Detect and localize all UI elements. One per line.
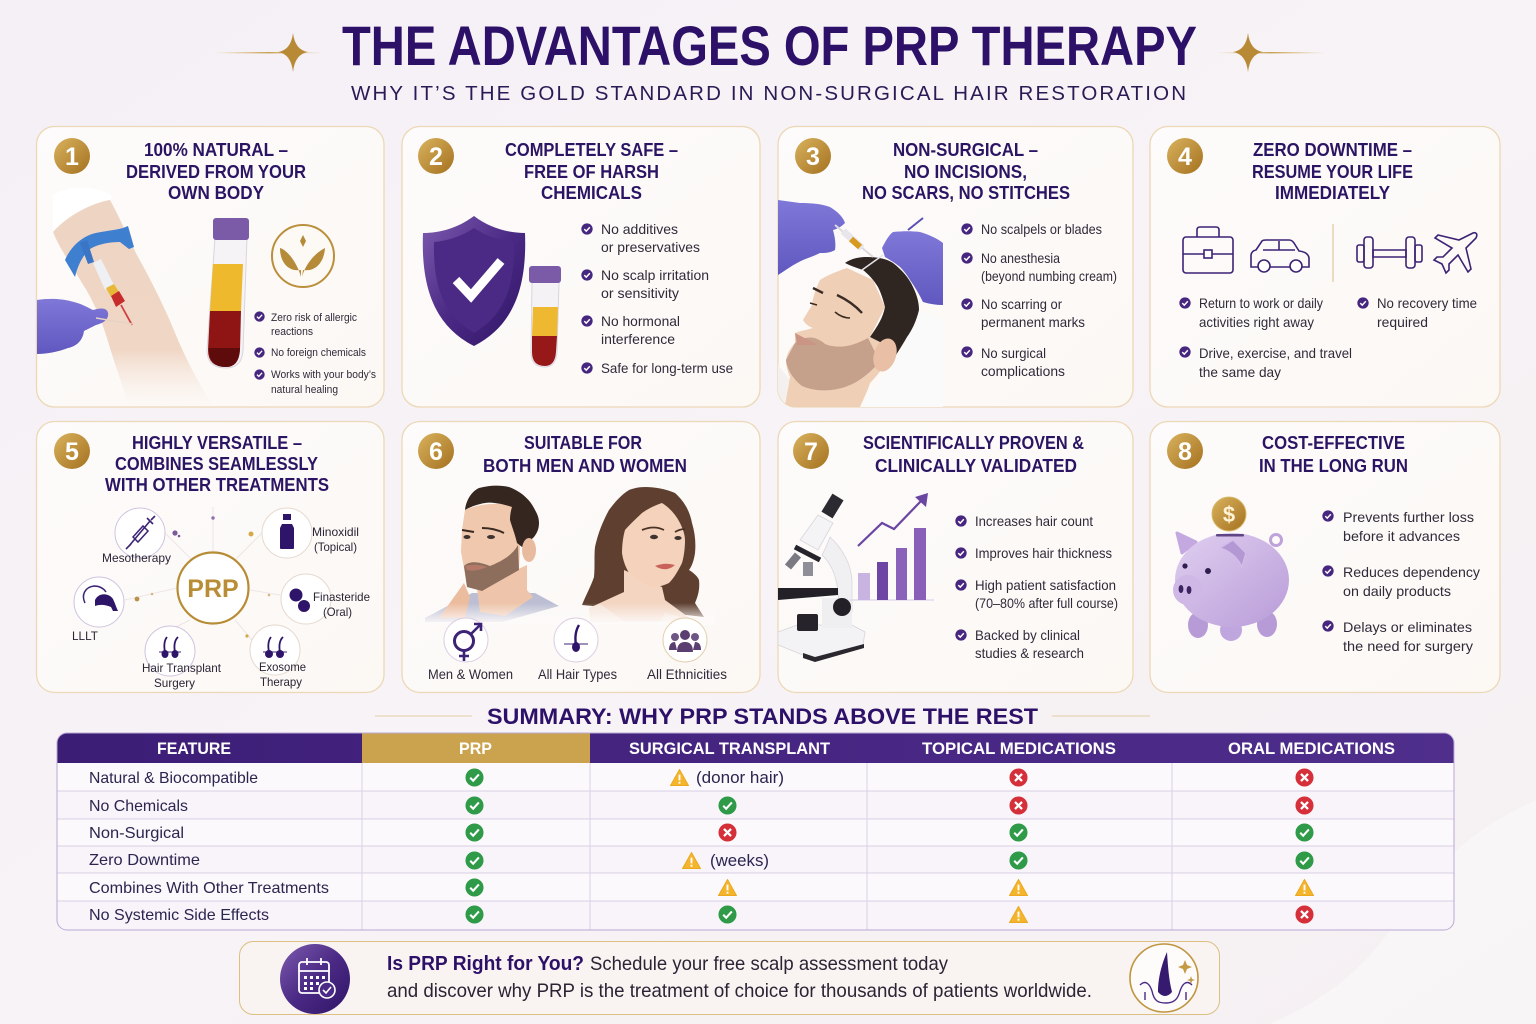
- fade under portraits: [420, 603, 715, 625]
- icon: right gold sparkle: [1217, 33, 1325, 72]
- node: exosome: Therapy: [260, 675, 302, 689]
- heading 1: OWN BODY: [168, 183, 264, 203]
- panel: 6 men and women: [402, 422, 760, 692]
- bullets 7: Improves hair thickness: [975, 545, 1112, 561]
- bullets 4: Drive, exercise, and travel: [1199, 345, 1352, 361]
- row: zero downtime: [89, 851, 1314, 870]
- heading 5: HIGHLY VERSATILE –: [132, 433, 302, 453]
- heading 2: [505, 140, 678, 203]
- node: mesotherapy: Mesotherapy: [102, 551, 171, 565]
- bullets 2: No additives: [601, 221, 678, 237]
- bullets 1: No foreign chemicals: [271, 347, 366, 359]
- number badge 7: [793, 433, 829, 469]
- bullets 4: Return to work or daily: [1199, 295, 1323, 311]
- node: hair transplant: Hair Transplant: [142, 661, 222, 675]
- call to action text: Is PRP Right for You?: [387, 952, 584, 975]
- heading 8: [1259, 433, 1408, 476]
- number badge 2: 2: [429, 143, 443, 171]
- bullets 1: Zero risk of allergic: [271, 312, 357, 324]
- PRP center circle: [178, 552, 248, 624]
- heading 1: 100% NATURAL –: [144, 140, 288, 160]
- row: non-surgical: Non-Surgical: [89, 825, 184, 842]
- chart: rising bars: [850, 493, 934, 600]
- heading 4: RESUME YOUR LIFE: [1252, 162, 1413, 182]
- call to action banner: [240, 942, 1220, 1014]
- heading 4: [1252, 140, 1413, 203]
- illustration: woman portrait: [582, 487, 704, 622]
- subtitle: WHY IT’S THE GOLD STANDARD IN NON-SURGICAL HAIR RESTORATION: [351, 82, 1186, 105]
- icon: shield with check: [423, 216, 525, 346]
- bullets 7: studies & research: [975, 645, 1084, 661]
- row: combines with other treatments: [89, 878, 1314, 897]
- node: minoxidil: (Topical): [314, 540, 357, 554]
- heading 4: IMMEDIATELY: [1275, 183, 1390, 203]
- panel: 4 zero downtime: [1150, 126, 1500, 407]
- heading 2: CHEMICALS: [541, 183, 642, 203]
- heading 2: FREE OF HARSH: [524, 162, 659, 182]
- icon: gold leaves: [272, 225, 334, 287]
- row: zero downtime: (weeks): [710, 852, 769, 870]
- table header: FEATURE: [157, 740, 231, 758]
- heading 1: DERIVED FROM YOUR: [126, 162, 306, 182]
- panel: 2 safe: [402, 126, 760, 407]
- number badge 3: [795, 138, 831, 174]
- node: minoxidil: Minoxidil: [312, 525, 359, 539]
- icon: airplane: [1434, 233, 1477, 273]
- heading 7: [863, 433, 1084, 476]
- bullets 7: (70–80% after full course): [975, 595, 1118, 611]
- call to action text: Schedule your free scalp assessment today: [590, 953, 948, 975]
- panel: 5 versatile: [36, 422, 384, 692]
- heading 5: WITH OTHER TREATMENTS: [105, 475, 329, 495]
- number badge 5: 5: [65, 438, 79, 466]
- bullets 8: Delays or eliminates: [1343, 619, 1472, 635]
- bullets 4: [1179, 295, 1477, 380]
- number badge 1: [54, 138, 90, 174]
- row: non-surgical: [89, 823, 1314, 842]
- icon: all hair types: All Hair Types: [538, 666, 617, 682]
- icon: all ethnicities: [647, 618, 727, 682]
- illustration: man portrait: [425, 486, 559, 622]
- bullets 2: Safe for long-term use: [601, 360, 733, 376]
- bullets 4: required: [1377, 314, 1428, 330]
- illustration: arm with syringe: [37, 200, 202, 390]
- row: no systemic side effects: No Systemic Side Effects: [89, 907, 269, 924]
- icon: men and women: Men & Women: [428, 666, 513, 682]
- panel: 8 cost-effective: [1150, 422, 1500, 692]
- node: mesotherapy: [102, 508, 171, 565]
- bullets 2: or sensitivity: [601, 285, 679, 301]
- bullets 7: High patient satisfaction: [975, 577, 1116, 593]
- heading 8: COST-EFFECTIVE: [1262, 433, 1405, 453]
- bullets 4: No recovery time: [1377, 295, 1477, 311]
- bullets 1: Works with your body’s: [271, 369, 376, 381]
- table header: PRP: [459, 740, 492, 758]
- panel: 3 non-surgical: [778, 126, 1133, 407]
- icon: all hair types: [538, 618, 617, 682]
- heading 2: COMPLETELY SAFE –: [505, 140, 678, 160]
- call to action text: and discover why PRP is the treatment of choice for thousands of patients worldwide.: [387, 980, 1092, 1002]
- icon: all ethnicities: All Ethnicities: [647, 666, 727, 682]
- bullets 8: on daily products: [1343, 583, 1451, 599]
- bullets 7: Backed by clinical: [975, 627, 1080, 643]
- bullets 8: Prevents further loss: [1343, 509, 1474, 525]
- table header: [157, 740, 1395, 758]
- bullets 3: No anesthesia: [981, 250, 1060, 266]
- heading 7: CLINICALLY VALIDATED: [875, 456, 1077, 476]
- heading 1: [126, 140, 306, 203]
- number badge 8: 8: [1178, 438, 1192, 466]
- bullets 4: the same day: [1199, 364, 1281, 380]
- bullets 3: No scalpels or blades: [981, 221, 1102, 237]
- number badge 8: [1167, 433, 1203, 469]
- bullets 2: or preservatives: [601, 239, 700, 255]
- bullets 1: natural healing: [271, 384, 338, 396]
- number badge 6: [418, 433, 454, 469]
- bullets 7: Increases hair count: [975, 513, 1093, 529]
- table header: TOPICAL MEDICATIONS: [922, 740, 1116, 758]
- number badge 4: [1167, 138, 1203, 174]
- bullets 1: reactions: [271, 326, 313, 338]
- bullets 2: No scalp irritation: [601, 267, 709, 283]
- heading 3: NO SCARS, NO STITCHES: [862, 183, 1070, 203]
- illustration: patient with injection: [778, 200, 943, 407]
- node: minoxidil: [262, 508, 359, 558]
- heading 6: [483, 433, 687, 476]
- bullets 8: [1322, 509, 1480, 654]
- row: no chemicals: [89, 796, 1314, 815]
- row: no chemicals: No Chemicals: [89, 798, 188, 815]
- connector lines and dots: [125, 507, 280, 640]
- number badge 1: 1: [65, 143, 79, 171]
- panel: 7 proven: [778, 422, 1133, 692]
- bullets 3: No scarring or: [981, 296, 1062, 312]
- node: finasteride: Finasteride: [313, 590, 370, 604]
- heading 5: [105, 433, 329, 495]
- bullets 3: permanent marks: [981, 314, 1085, 330]
- node: hair transplant: [142, 626, 222, 690]
- bullets 8: Reduces dependency: [1343, 564, 1480, 580]
- table header: ORAL MEDICATIONS: [1228, 740, 1395, 758]
- bullets 3: No surgical: [981, 345, 1046, 361]
- node: LLLT: [72, 577, 124, 643]
- illustration: microscope: [778, 497, 865, 662]
- heading 8: IN THE LONG RUN: [1259, 456, 1408, 476]
- icon: calendar: [280, 944, 350, 1014]
- heading 6: BOTH MEN AND WOMEN: [483, 456, 687, 476]
- bullets 2: [581, 221, 733, 376]
- icon: men and women: [428, 618, 513, 682]
- icon: briefcase: [1183, 227, 1233, 273]
- number badge 7: 7: [804, 438, 818, 466]
- bullets 3: [961, 221, 1117, 379]
- node: hair transplant: Surgery: [154, 676, 195, 690]
- bullets 1: [254, 311, 376, 396]
- heading 5: COMBINES SEAMLESSLY: [115, 454, 318, 474]
- heading 7: SCIENTIFICALLY PROVEN &: [863, 433, 1084, 453]
- node: finasteride: (Oral): [323, 605, 352, 619]
- row: no systemic side effects: [89, 905, 1314, 924]
- title: THE ADVANTAGES OF PRP THERAPY: [342, 14, 1197, 77]
- node: finasteride: [281, 574, 370, 624]
- node: exosome: [250, 625, 306, 689]
- bullets 2: interference: [601, 331, 675, 347]
- illustration: small tube: [529, 266, 561, 367]
- row: zero downtime: Zero Downtime: [89, 852, 200, 869]
- comparison table: [57, 733, 1454, 930]
- heading 3: NON-SURGICAL –: [893, 140, 1038, 160]
- summary heading: SUMMARY: WHY PRP STANDS ABOVE THE REST: [487, 704, 1038, 729]
- row: natural and biocompatible: (donor hair): [696, 769, 784, 787]
- icon: piggy bank with coin: [1173, 497, 1289, 641]
- row: natural and biocompatible: [89, 768, 1314, 787]
- heading 3: NO INCISIONS,: [904, 162, 1027, 182]
- number badge 3: 3: [806, 143, 820, 171]
- bullets 8: before it advances: [1343, 528, 1460, 544]
- panel: 1 natural: [36, 126, 384, 407]
- node: exosome: Exosome: [259, 660, 306, 674]
- number badge 5: [54, 433, 90, 469]
- icon: piggy bank with coin: $: [1223, 502, 1235, 527]
- row: combines with other treatments: Combines With Other Treatments: [89, 880, 329, 897]
- number badge 2: [418, 138, 454, 174]
- bullets 4: activities right away: [1199, 314, 1314, 330]
- bullets 7: [955, 513, 1118, 661]
- bullets 3: complications: [981, 363, 1065, 379]
- bullets 8: the need for surgery: [1343, 638, 1473, 654]
- row: natural and biocompatible: Natural & Biocompatible: [89, 770, 258, 787]
- illustration: blood tube: [207, 218, 249, 368]
- icon: car: [1251, 240, 1309, 272]
- heading 6: SUITABLE FOR: [524, 433, 642, 453]
- number badge 4: 4: [1178, 143, 1192, 171]
- bullets 2: No hormonal: [601, 313, 680, 329]
- number badge 6: 6: [429, 438, 443, 466]
- heading 4: ZERO DOWNTIME –: [1253, 140, 1412, 160]
- icon: dumbbell: [1357, 237, 1422, 268]
- icon: hair follicle: [1130, 944, 1198, 1012]
- PRP center circle: PRP: [187, 575, 239, 603]
- bullets 3: (beyond numbing cream): [981, 268, 1117, 284]
- node: LLLT: LLLT: [72, 629, 99, 643]
- call to action text: [387, 952, 1092, 1002]
- table header: SURGICAL TRANSPLANT: [629, 740, 830, 758]
- heading 3: [862, 140, 1070, 203]
- icon: left gold sparkle: [215, 33, 323, 72]
